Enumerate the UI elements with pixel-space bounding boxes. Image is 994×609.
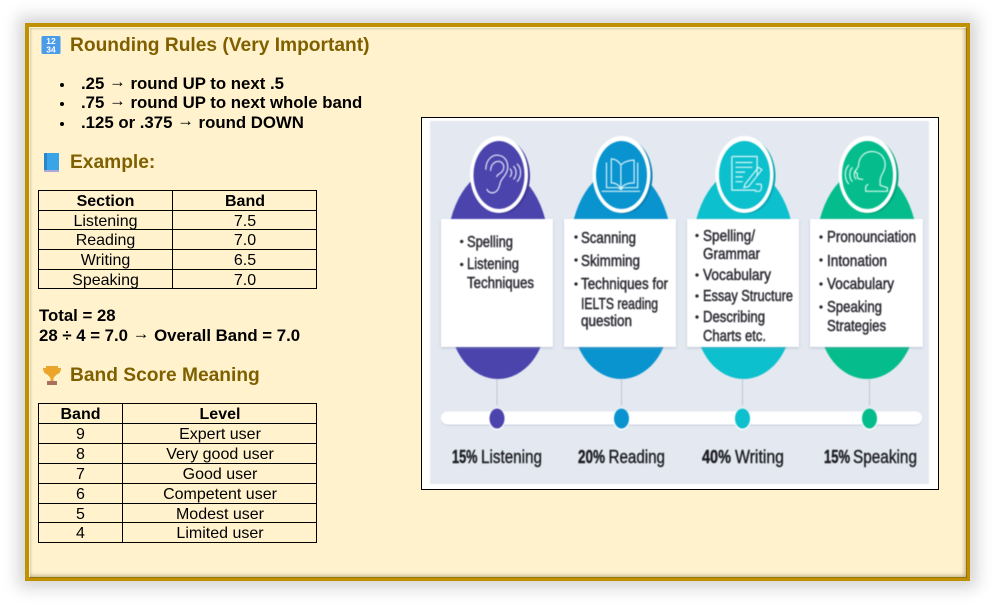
column: writing: Essay Structure	[703, 288, 793, 305]
text: total calculation: 28 ÷ 4 = 7.0 → Overall Band = 7.0	[39, 324, 300, 345]
table: example section bands	[38, 190, 317, 289]
table: example section bands: 7.5	[234, 213, 256, 230]
icon: paper and pen	[732, 156, 762, 191]
table: band levels: Band	[60, 406, 100, 423]
panel: IELTS skills picture	[421, 117, 939, 490]
table: example section bands: Speaking	[72, 272, 139, 289]
table: example section bands: 6.5	[234, 252, 256, 269]
heading: band score meaning: Band Score Meaning	[70, 365, 260, 386]
list: rounding rules: .25 → round UP to next .5	[81, 72, 284, 92]
column: speaking: Speaking	[827, 299, 882, 316]
column: writing: Spelling/	[703, 228, 755, 245]
table: example section bands: Listening	[73, 213, 138, 230]
column: writing: Vocabulary	[703, 267, 771, 284]
table: band levels: 4	[76, 525, 85, 542]
icon: 1234 numbers tile: 34	[46, 44, 56, 54]
column: reading: IELTS reading	[581, 296, 658, 313]
column: reading: Scanning	[581, 230, 636, 247]
table: example section bands: Reading	[76, 232, 135, 249]
table: band levels: 7	[76, 466, 85, 483]
table: band levels: Limited user	[176, 525, 264, 542]
icon: speaking head	[845, 152, 887, 191]
column: writing: Describing	[703, 309, 765, 326]
text: total calculation: Total = 28	[39, 306, 116, 325]
labels: section percentages	[452, 447, 917, 467]
labels: section percentages: 15%	[824, 447, 850, 467]
column: writing: Charts etc.	[703, 328, 766, 345]
heading: example: Example:	[70, 152, 155, 173]
labels: section percentages: Speaking	[853, 447, 917, 467]
icon: trophy	[43, 366, 61, 385]
labels: section percentages: Writing	[735, 447, 784, 467]
column: reading	[564, 136, 676, 406]
table: band levels: Very good user	[166, 446, 274, 463]
table: example section bands: 7.0	[234, 272, 256, 289]
labels: section percentages: 40%	[702, 447, 731, 467]
table: example section bands: Section	[77, 193, 134, 210]
heading: rounding rules: Rounding Rules (Very Important)	[70, 35, 370, 56]
table: example section bands: Writing	[81, 252, 130, 269]
table: example section bands: Band	[225, 193, 265, 210]
list: rounding rules: .75 → round UP to next whole band	[81, 90, 362, 112]
column: speaking: Vocabulary	[827, 276, 894, 293]
column: speaking	[810, 136, 923, 406]
table: band levels: 6	[76, 486, 85, 503]
table: example section bands: 7.0	[234, 232, 256, 249]
labels: section percentages: 20%	[578, 447, 605, 467]
labels: section percentages: Listening	[481, 447, 542, 467]
table: band levels: 5	[76, 506, 85, 523]
column: speaking: Strategies	[827, 318, 886, 335]
labels: section percentages: Reading	[608, 447, 665, 467]
table: band levels: Level	[200, 406, 240, 423]
column: speaking: Intonation	[827, 253, 887, 270]
column: listening: Techniques	[467, 275, 534, 292]
text: total calculation	[39, 306, 300, 345]
icon: 1234 numbers tile	[42, 36, 60, 54]
icon: blue book	[44, 153, 59, 172]
column: writing	[687, 136, 799, 406]
labels: section percentages: 15%	[452, 447, 478, 467]
table: band levels: 9	[76, 426, 85, 443]
column: writing: Grammar	[703, 246, 761, 263]
column: reading: Techniques for	[581, 276, 669, 293]
table: band levels: 8	[76, 446, 85, 463]
list: rounding rules: .125 or .375 → round DOWN	[81, 110, 304, 132]
icon: 1234 numbers tile: 12	[46, 36, 56, 46]
column: reading: question	[581, 313, 632, 330]
table: band levels	[38, 403, 317, 543]
list: rounding rules	[60, 72, 362, 132]
column: listening: Listening	[467, 256, 519, 273]
icon: open book	[602, 159, 640, 191]
table: band levels: Modest user	[176, 506, 264, 523]
column: listening	[441, 136, 553, 406]
column: listening: Spelling	[467, 234, 513, 251]
column: speaking: Pronounciation	[827, 229, 916, 246]
timeline bar	[441, 408, 922, 430]
table: band levels: Good user	[183, 466, 257, 483]
column: reading: Skimming	[581, 253, 640, 270]
table: band levels: Expert user	[179, 426, 261, 443]
table: band levels: Competent user	[163, 486, 277, 503]
icon: ear	[486, 155, 521, 193]
